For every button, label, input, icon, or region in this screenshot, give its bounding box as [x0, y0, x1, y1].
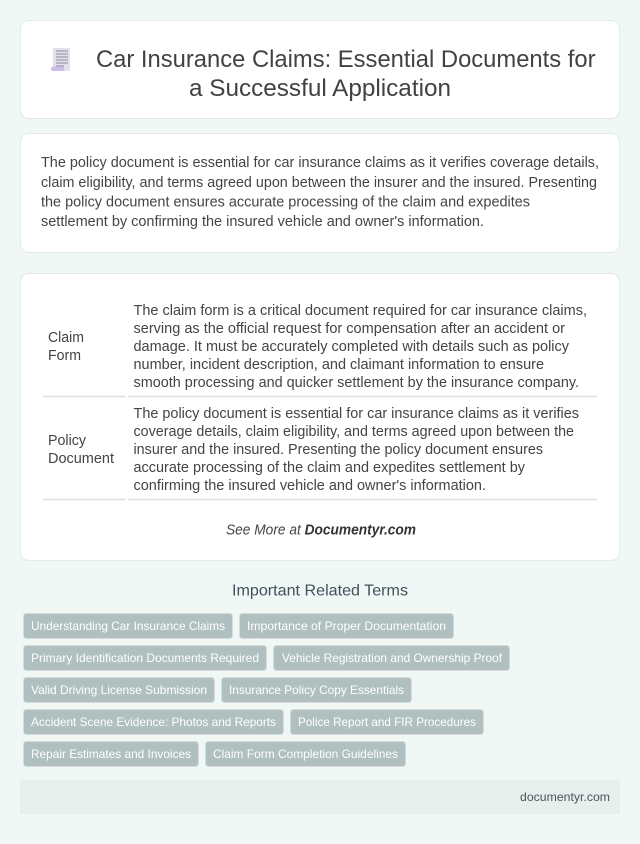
label: policy document — [48, 433, 114, 467]
text block: claim form description: damage. It must be accurately completed with details such as policy — [134, 339, 570, 355]
tag: accident scene evidence: Accident Scene Evidence: Photos and Reports — [31, 715, 276, 729]
text block: claim form description: serving as the official request for compensation after an accident or — [134, 321, 565, 337]
tag: repair estimates — [24, 742, 198, 766]
text block: introduction: the policy document ensures accurate processing of the claim and expedites — [41, 194, 530, 210]
tag: claim form guidelines: Claim Form Completion Guidelines — [213, 747, 398, 761]
text block: policy document description: The policy document is essential for car insurance claims as it verifies — [134, 406, 579, 422]
label: claim form — [48, 330, 84, 364]
text block: claim form description — [134, 303, 587, 391]
tag: primary identification documents — [24, 646, 266, 670]
tag: claim form guidelines — [206, 742, 406, 766]
tag: valid driving license: Valid Driving License Submission — [31, 683, 207, 697]
tag: importance of proper documentation: Importance of Proper Documentation — [247, 619, 446, 633]
text block: policy document description: accurate processing of the claim and expedites settlement by — [134, 460, 526, 476]
footer: site name: documentyr.com — [520, 790, 610, 804]
tag: accident scene evidence — [24, 710, 284, 734]
label: policy document: Policy — [48, 433, 87, 449]
text block: policy document description: insurer and the insured. Presenting the policy document ensures — [134, 442, 543, 458]
tag: insurance policy copy — [222, 678, 412, 702]
footer — [20, 780, 620, 814]
heading: title: Car Insurance Claims: Essential Documents for — [96, 46, 596, 73]
table row: policy document — [48, 406, 579, 494]
text block: introduction: claim eligibility, and terms agreed upon between the insurer and the insured. Presenting — [41, 175, 597, 191]
tag: primary identification documents: Primary Identification Documents Required — [31, 651, 259, 665]
text block: claim form description: The claim form is a critical document required for car insurance claims, — [134, 303, 587, 319]
label: claim form: Form — [48, 348, 81, 364]
icon: document receipt — [51, 48, 70, 71]
label: policy document: Document — [48, 451, 114, 467]
tag: police report — [290, 710, 484, 734]
text block: introduction: settlement by confirming the insured vehicle and owner's information. — [41, 214, 484, 230]
label: claim form: Claim — [48, 330, 84, 346]
tag: understanding car insurance claims — [24, 614, 232, 638]
text block: claim form description: number, incident description, and claimant information to ensure — [134, 357, 544, 373]
panel: title — [20, 20, 620, 118]
tag: vehicle registration — [274, 646, 510, 670]
tag: understanding car insurance claims: Understanding Car Insurance Claims — [31, 619, 225, 633]
text block: claim form description: smooth processing and quicker settlement by the insurance company. — [134, 375, 579, 391]
heading: title — [96, 46, 596, 102]
panel: document table — [20, 274, 620, 560]
link: see more: See More at Documentyr.com — [226, 522, 416, 538]
text block: policy document description — [134, 406, 579, 494]
text block: policy document description: coverage details, claim eligibility, and terms agreed upon between the — [134, 424, 574, 440]
tag: valid driving license — [24, 678, 214, 702]
table row: claim form — [48, 303, 587, 391]
text block: introduction — [41, 155, 599, 230]
tag: police report: Police Report and FIR Procedures — [298, 715, 476, 729]
related terms tags — [24, 614, 510, 766]
tag: insurance policy copy: Insurance Policy Copy Essentials — [229, 683, 404, 697]
panel: introduction — [20, 134, 620, 252]
tag: importance of proper documentation — [240, 614, 454, 638]
text block: introduction: The policy document is essential for car insurance claims as it verifies coverage details, — [41, 155, 599, 171]
heading: important related terms: Important Related Terms — [232, 582, 408, 600]
tag: repair estimates: Repair Estimates and Invoices — [31, 747, 191, 761]
tag: vehicle registration: Vehicle Registration and Ownership Proof — [282, 651, 503, 665]
text block: policy document description: confirming the insured vehicle and owner's information. — [134, 478, 486, 494]
heading: title: a Successful Application — [189, 75, 451, 102]
